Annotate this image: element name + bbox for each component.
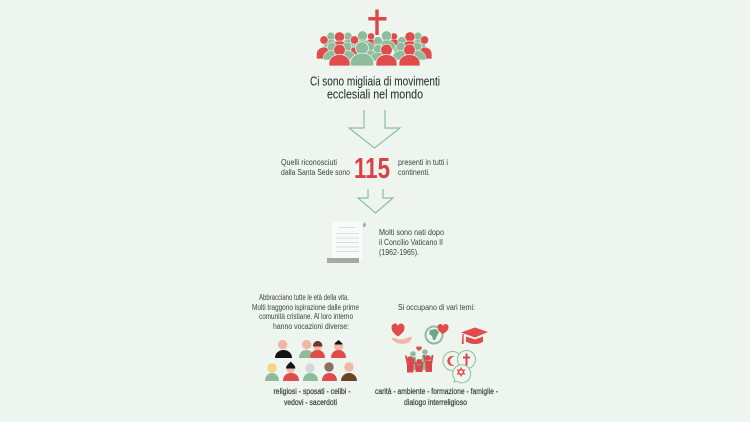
text: ages of life: comunità cristiane. Al loro interno [259, 312, 353, 321]
icon: charity heart and hand [392, 324, 412, 344]
icon: interreligious dialogue bubbles [443, 350, 476, 383]
heading: ecclesiali nel mondo [327, 88, 423, 102]
icon: people vocations [265, 340, 357, 381]
heading [310, 74, 440, 102]
number: 115: 115 [354, 153, 390, 185]
icon: graduation cap [461, 328, 488, 344]
icon: families [405, 346, 433, 372]
text: themes list [375, 387, 498, 407]
text: present on all continents [398, 158, 448, 177]
text: Vatican Council: il Concilio Vaticano II [379, 238, 443, 247]
text: Vatican Council [379, 228, 444, 257]
text: Vatican Council: (1962-1965). [379, 248, 419, 257]
icon: document scroll [327, 222, 366, 263]
text: vocations list: religiosi - sposati - celibi - [274, 387, 351, 396]
icon: red cross [368, 10, 386, 35]
text: recognised movements [281, 158, 350, 177]
text: recognised movements: dalla Santa Sede sono [281, 168, 350, 177]
text: recognised movements: Quelli riconosciuti [281, 158, 337, 167]
icon: globe with heart [426, 324, 448, 344]
text: ages of life: Abbracciano tutte le età della vita. [259, 293, 349, 302]
icon: crowd with cross [316, 10, 432, 66]
text: themes heading: Si occupano di vari temi: [398, 303, 475, 312]
text: present on all continents: continenti. [398, 168, 430, 177]
text: themes list: dialogo interreligioso [404, 398, 467, 407]
text: vocations list [274, 387, 351, 407]
arrow: large down arrow [349, 110, 400, 148]
text: themes list: carità - ambiente - formazione - famiglie - [375, 387, 498, 396]
text: present on all continents: presenti in tutti i [398, 158, 448, 167]
text: vocations list: vedovi - sacerdoti [284, 398, 337, 407]
text: ages of life: Molti traggono ispirazione dalle prime [252, 303, 359, 312]
text: ages of life: hanno vocazioni diverse: [273, 322, 349, 331]
text: Vatican Council: Molti sono nati dopo [379, 228, 444, 237]
arrow: small down arrow [358, 189, 393, 213]
heading: Ci sono migliaia di movimenti [310, 74, 440, 88]
text: ages of life [252, 293, 359, 331]
